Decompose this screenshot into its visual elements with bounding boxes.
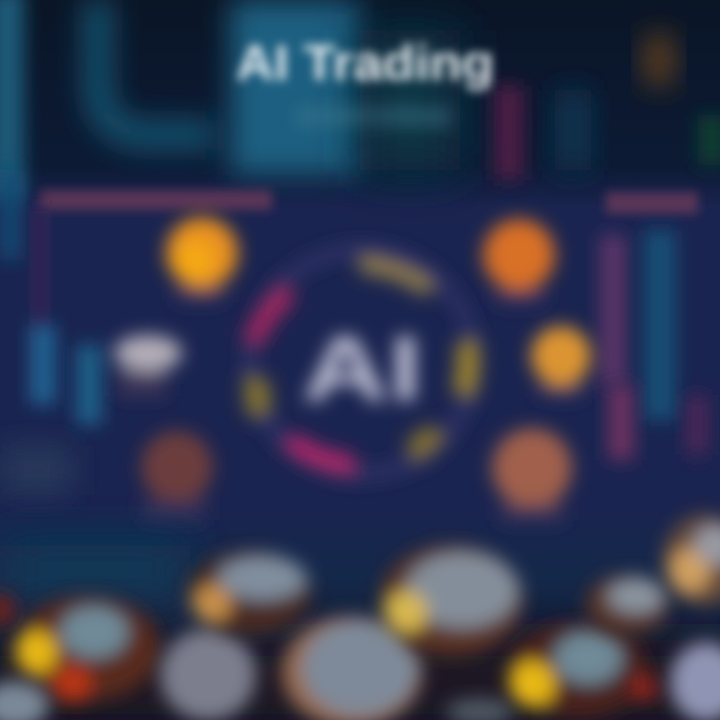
icon: brown circle lower left <box>141 431 213 520</box>
coin: centre bottom <box>282 616 422 720</box>
coin: bottom mid <box>446 698 514 720</box>
AI label: AI <box>302 318 422 420</box>
icon: tan circle lower right <box>492 428 572 521</box>
coin: centre large <box>380 544 524 656</box>
coin: right bottom <box>670 642 720 720</box>
icon: white cloud left <box>114 335 182 396</box>
circular ring <box>250 250 474 474</box>
subtitle: overview <box>296 99 451 130</box>
icon: orange circle top left <box>166 217 238 302</box>
panel: left chart <box>2 190 272 495</box>
coin: far left <box>15 596 160 703</box>
coin: shadow base <box>0 545 720 720</box>
panel: top screen glows <box>0 0 720 260</box>
icon: orange circle top right <box>483 219 555 304</box>
coin: right middle <box>586 574 670 634</box>
coin: lower right <box>508 622 658 718</box>
coin pile <box>0 514 720 720</box>
icon: amber circle right <box>531 326 591 398</box>
coin: lower left corner <box>0 594 49 720</box>
panel: right chart <box>600 192 708 460</box>
coin: grey left <box>160 629 256 720</box>
coin: right top <box>663 514 720 606</box>
title: AI Trading <box>236 35 494 91</box>
coin: upper left <box>188 550 312 634</box>
